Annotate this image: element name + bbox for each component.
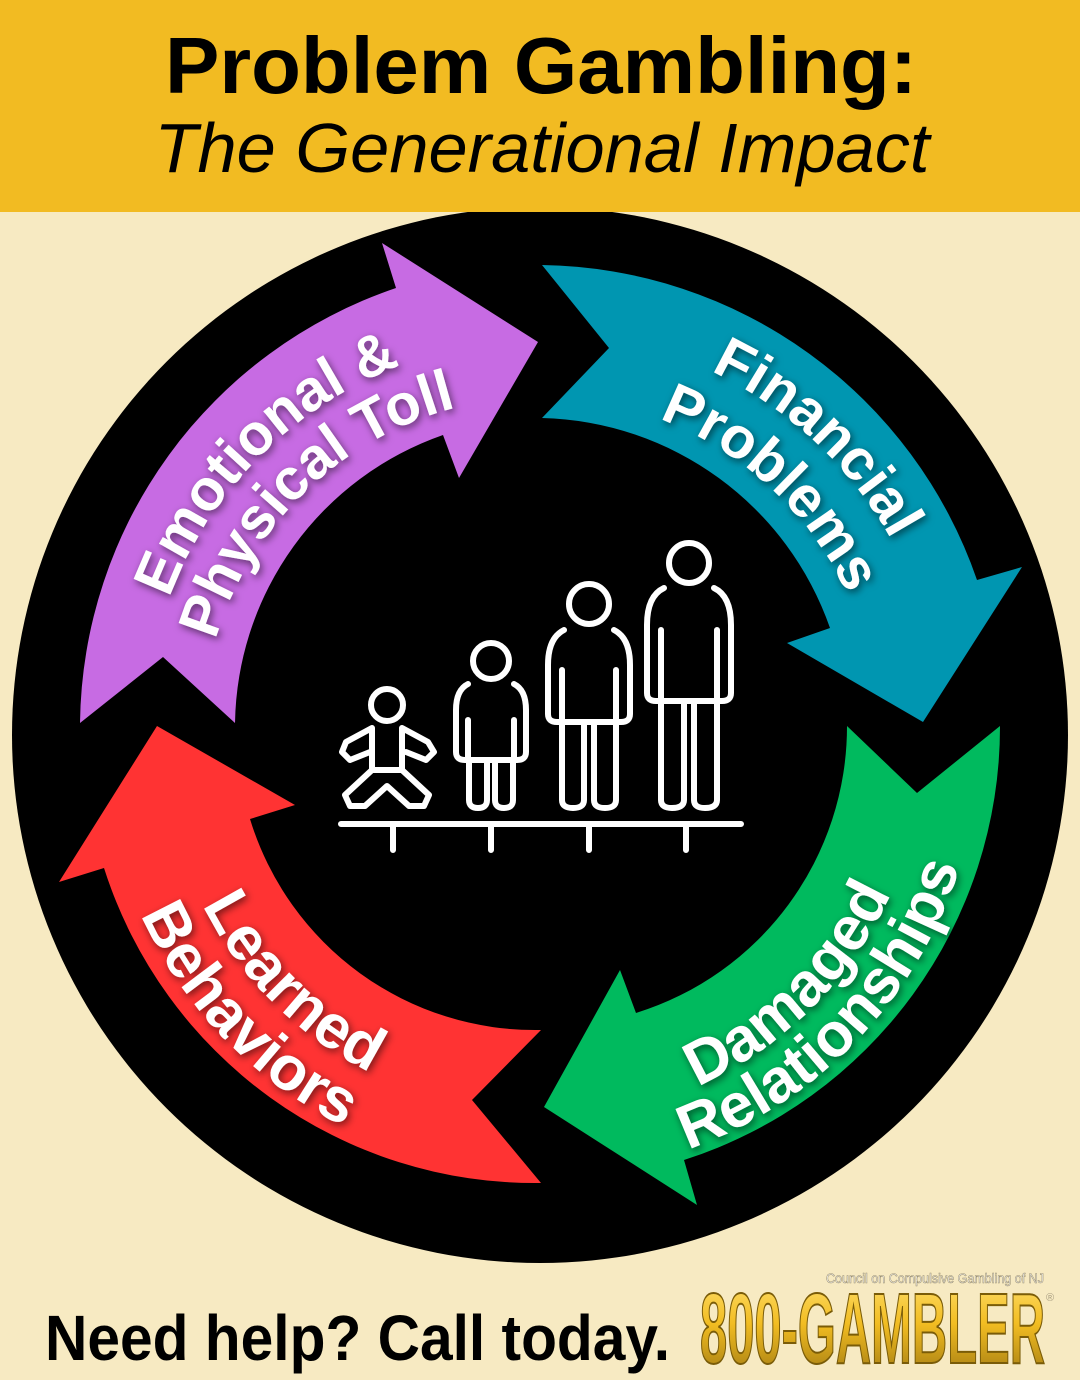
arrow: financial problems: Financial	[713, 337, 930, 542]
footer call to action: Need help? Call today.	[45, 1302, 670, 1374]
arrow: learned behaviors: Behaviors	[140, 898, 360, 1130]
arrow: learned behaviors: Learned	[202, 887, 394, 1078]
baby	[342, 689, 434, 806]
subtitle: The Generational Impact	[154, 109, 932, 187]
adult	[647, 543, 731, 808]
arrow: financial problems: Problems	[662, 383, 877, 596]
logo: 800-GAMBLER: Council on Compulsive Gambling of NJ	[826, 1270, 1044, 1286]
title: Problem Gambling:	[165, 21, 917, 110]
child	[456, 643, 526, 808]
logo: 800-GAMBLER: ®	[1046, 1292, 1054, 1304]
arrow: emotional & physical toll: Emotional &	[132, 333, 404, 602]
arrow: emotional & physical toll	[80, 243, 538, 723]
arrow: learned behaviors	[59, 726, 541, 1183]
icon: family generations	[341, 543, 741, 850]
floor line	[341, 824, 741, 850]
arrow: damaged relationships: Relationships	[674, 860, 964, 1155]
arrow: emotional & physical toll: Physical Toll	[176, 367, 458, 644]
arrow: damaged relationships: Damaged	[680, 877, 894, 1092]
arrow: financial problems	[542, 265, 1022, 722]
header band	[0, 0, 1080, 212]
teen	[548, 584, 630, 808]
black circle	[12, 207, 1068, 1263]
arrow: damaged relationships	[544, 726, 1000, 1205]
